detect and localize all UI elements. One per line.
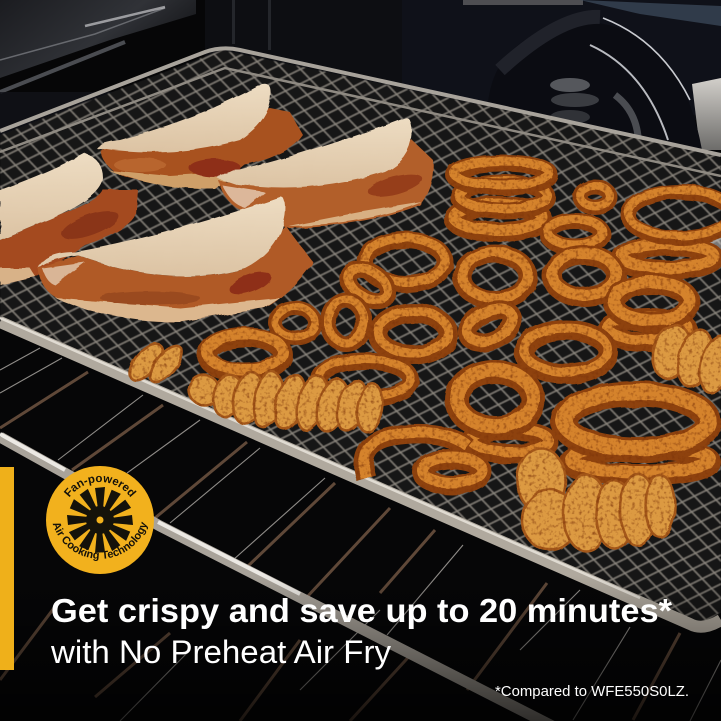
oven back wall and fan cover [205, 0, 721, 150]
oven rack bars and wires below tray [0, 348, 721, 721]
badge arc text: bottom: Air Cooking Technology [52, 522, 148, 561]
badge arc text: top: Fan-powered [64, 476, 137, 498]
icon: fan [67, 487, 133, 553]
oven upper left door panel [0, 0, 215, 142]
footnote: *Compared to WFE550S0LZ. [495, 684, 689, 700]
taco: top [96, 84, 303, 189]
yellow accent bar [0, 467, 14, 670]
food: tacos [0, 84, 433, 322]
fry: spiral bottom right [517, 448, 675, 551]
taco: left [0, 153, 138, 285]
food: curly fries [123, 161, 721, 551]
fry cluster: upper right [548, 190, 721, 270]
fry: spiral right edge [647, 321, 721, 396]
fry cluster: middle [342, 238, 690, 349]
fry cluster: upper center [454, 161, 610, 232]
fry: large lower rings [364, 370, 710, 485]
taco: front [38, 197, 313, 322]
fry cluster: lower middle [207, 299, 608, 399]
headline: Get crispy and save up to 20 minutes* [51, 593, 672, 630]
taco: right [217, 118, 433, 228]
subheadline: with No Preheat Air Fry [50, 634, 391, 670]
badge: fan-powered air cooking technology [46, 466, 154, 574]
fry: spiral left row [123, 338, 386, 435]
bottom darkening gradient [0, 575, 721, 721]
